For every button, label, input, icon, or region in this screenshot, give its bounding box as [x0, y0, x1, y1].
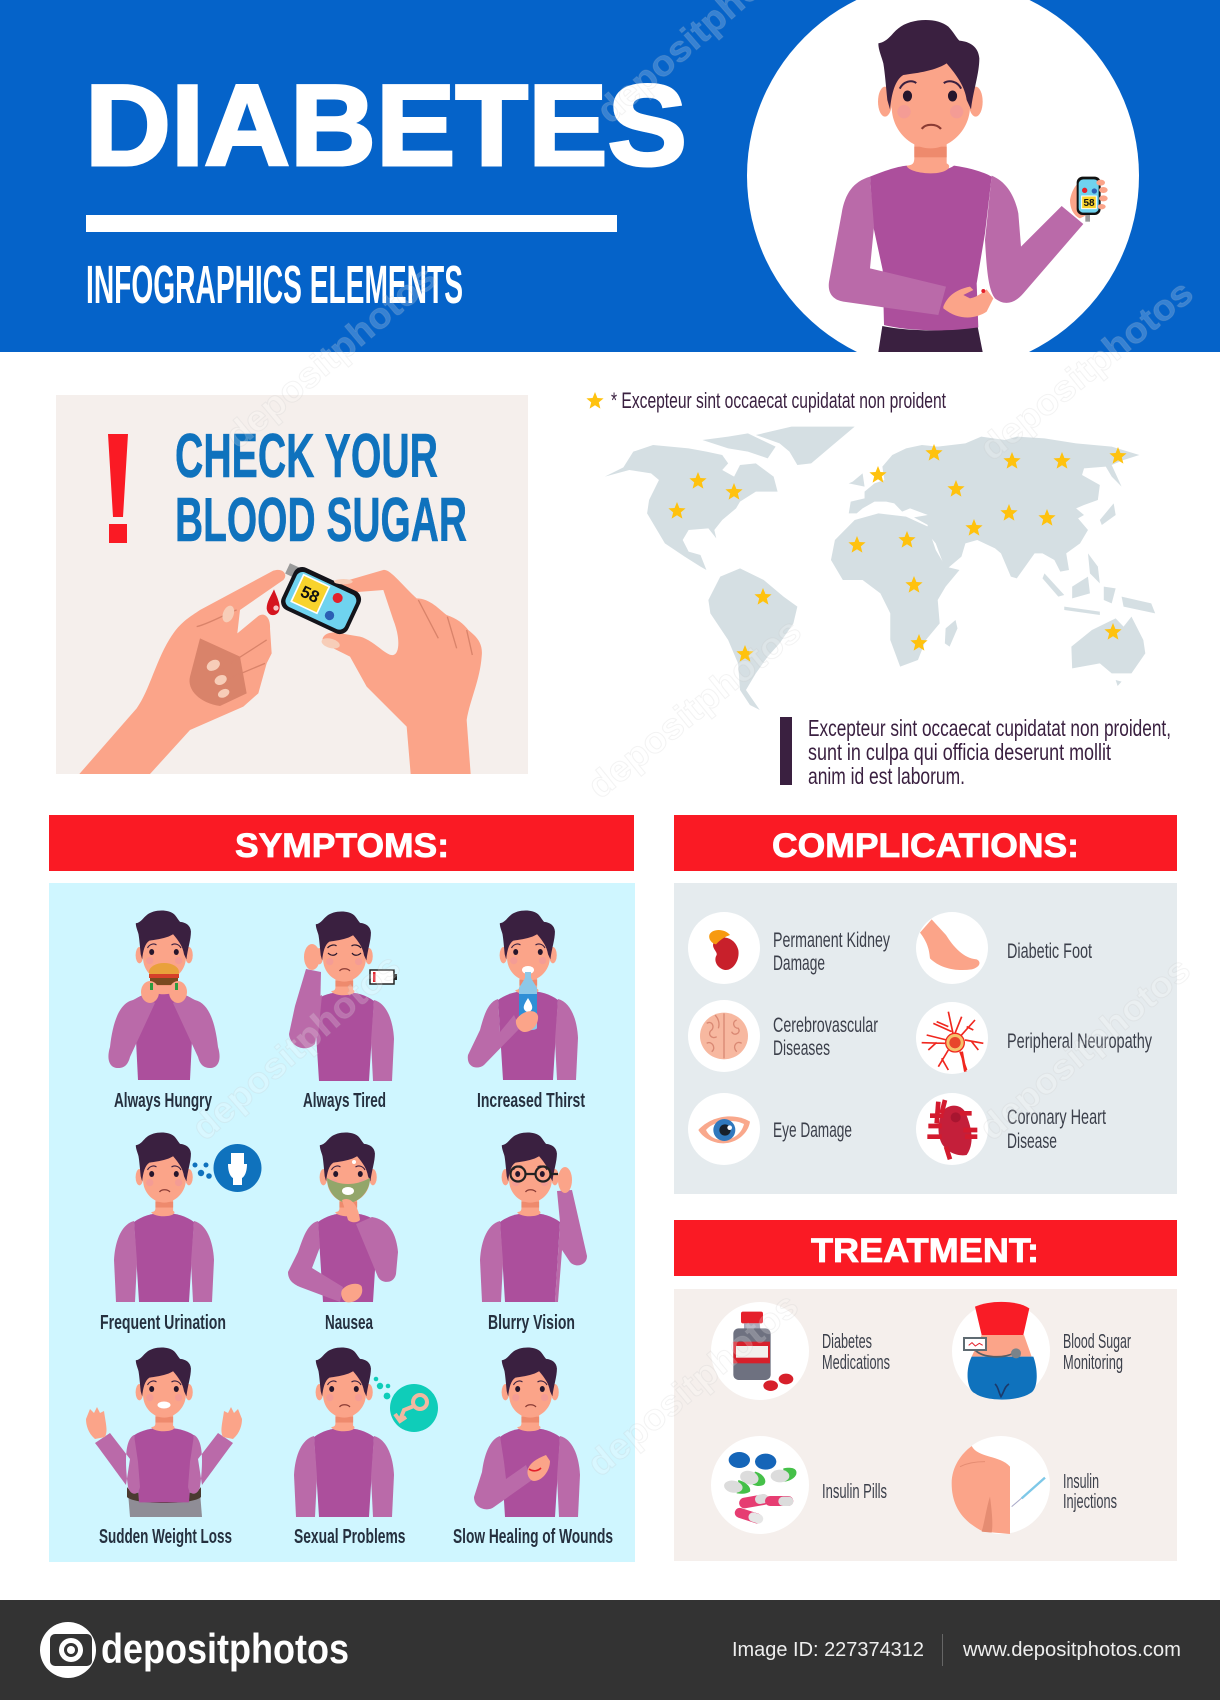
watermarks: depositphotos — [183, 945, 408, 1148]
panel: treatment — [674, 1220, 1177, 1561]
map caption — [780, 715, 1171, 789]
icon: male symbol bubble — [374, 1377, 438, 1432]
heading: check your blood sugar — [175, 422, 467, 555]
watermarks: depositphotos — [971, 271, 1201, 468]
treatment: diabetes medications: Diabetes — [822, 1331, 872, 1353]
symptom: frequent urination: Frequent Urination — [100, 1312, 226, 1334]
symptom: always tired: Always Tired — [303, 1090, 386, 1112]
icon: exclamation mark — [108, 434, 128, 543]
complication: kidney damage: Damage — [773, 952, 825, 975]
complications background — [674, 883, 1177, 1194]
world map — [605, 427, 1155, 710]
complication: cerebrovascular diseases: Diseases — [773, 1037, 830, 1060]
symptom: always tired — [289, 912, 397, 1112]
symptom: increased thirst: Increased Thirst — [477, 1090, 585, 1112]
treatment: insulin injections: Insulin — [1063, 1471, 1099, 1493]
complication: cerebrovascular diseases: Cerebrovascular — [773, 1014, 878, 1037]
treatment: insulin injections: Injections — [1063, 1491, 1117, 1513]
watermarks: depositphotos — [579, 1284, 806, 1484]
map caption: sunt in culpa qui officia deserunt mollit — [808, 739, 1111, 765]
symptom: blurry vision — [480, 1133, 587, 1334]
map legend: * Excepteur sint occaecat cupidatat non proident — [611, 388, 946, 413]
watermarks: depositphotos — [217, 256, 444, 456]
symptom: slow healing of wounds — [453, 1348, 613, 1548]
symptom: nausea — [288, 1133, 398, 1334]
watermarks — [183, 0, 1201, 1484]
watermarks: depositphotos — [971, 948, 1198, 1148]
watermarks: depositphotos — [579, 609, 809, 806]
treatment: blood sugar monitoring — [952, 1302, 1131, 1400]
complication: coronary heart disease: Coronary Heart — [1007, 1106, 1106, 1129]
icon: toilet bubble — [192, 1144, 262, 1192]
header banner — [0, 0, 1220, 352]
complication: coronary heart disease: Disease — [1007, 1130, 1057, 1153]
complication: peripheral neuropathy: Peripheral Neuropathy — [1007, 1030, 1152, 1053]
heading: check your blood sugar: CHECK YOUR — [175, 422, 438, 491]
symptoms heading — [49, 815, 634, 871]
symptoms heading: SYMPTOMS: — [235, 827, 449, 865]
complications heading — [674, 815, 1177, 871]
complication: kidney damage: Permanent Kidney — [773, 929, 890, 952]
treatment: blood sugar monitoring: Monitoring — [1063, 1352, 1123, 1374]
complication: kidney damage — [688, 912, 890, 984]
complication: coronary heart disease — [916, 1093, 1106, 1165]
complications heading: COMPLICATIONS: — [772, 827, 1079, 865]
hero character with glucose meter — [747, 0, 1139, 352]
symptom: nausea: Nausea — [325, 1312, 374, 1334]
complication: diabetic foot — [916, 912, 1092, 984]
map caption: anim id est laborum. — [808, 763, 965, 789]
treatment heading: TREATMENT: — [811, 1232, 1039, 1270]
illustration: hands testing blood with meter: 58 — [298, 582, 322, 607]
complication: eye damage — [688, 1093, 852, 1165]
symptom: sexual problems — [294, 1348, 438, 1548]
symptom: sudden weight loss: Sudden Weight Loss — [99, 1526, 232, 1548]
symptom: always hungry: Always Hungry — [114, 1090, 213, 1112]
treatment: insulin injections — [952, 1436, 1117, 1534]
footer logo — [40, 1622, 349, 1678]
illustration: hands testing blood with meter — [79, 561, 482, 774]
complication: eye damage: Eye Damage — [773, 1119, 852, 1142]
treatment: insulin pills — [711, 1436, 887, 1534]
symptom: frequent urination — [100, 1133, 262, 1334]
panel: check your blood sugar — [56, 395, 528, 774]
panel: symptoms — [49, 815, 635, 1562]
heading: check your blood sugar: BLOOD SUGAR — [175, 486, 467, 555]
treatment: diabetes medications: Medications — [822, 1352, 890, 1374]
symptom: blurry vision: Blurry Vision — [488, 1312, 575, 1334]
complication: diabetic foot: Diabetic Foot — [1007, 940, 1092, 963]
treatment: insulin pills: Insulin Pills — [822, 1481, 887, 1503]
treatment: diabetes medications — [711, 1302, 890, 1400]
treatment heading — [674, 1220, 1177, 1276]
map star markers — [668, 444, 1127, 662]
website: www.depositphotos.com — [962, 1639, 1181, 1661]
panel: complications — [674, 815, 1177, 1194]
symptom: increased thirst — [468, 911, 585, 1112]
symptom: slow healing of wounds: Slow Healing of Wounds — [453, 1526, 613, 1548]
hero character with glucose meter: 58 — [1083, 198, 1095, 209]
world map panel — [586, 388, 1171, 789]
complication: peripheral neuropathy — [916, 1002, 1152, 1074]
subtitle: INFOGRAPHICS ELEMENTS — [86, 255, 463, 315]
treatment: blood sugar monitoring: Blood Sugar — [1063, 1331, 1131, 1353]
symptom: sudden weight loss — [86, 1348, 242, 1548]
complication: cerebrovascular diseases — [688, 1000, 878, 1072]
treatment background — [674, 1289, 1177, 1561]
symptoms background — [49, 883, 635, 1562]
map legend — [586, 388, 946, 413]
title: DIABETES — [85, 62, 687, 190]
title underline — [86, 215, 617, 232]
symptom: always hungry — [108, 911, 220, 1112]
symptom: sexual problems: Sexual Problems — [294, 1526, 406, 1548]
image id: Image ID: 227374312 — [732, 1639, 924, 1661]
footer logo: depositphotos — [101, 1625, 349, 1672]
footer bar — [0, 1600, 1220, 1700]
